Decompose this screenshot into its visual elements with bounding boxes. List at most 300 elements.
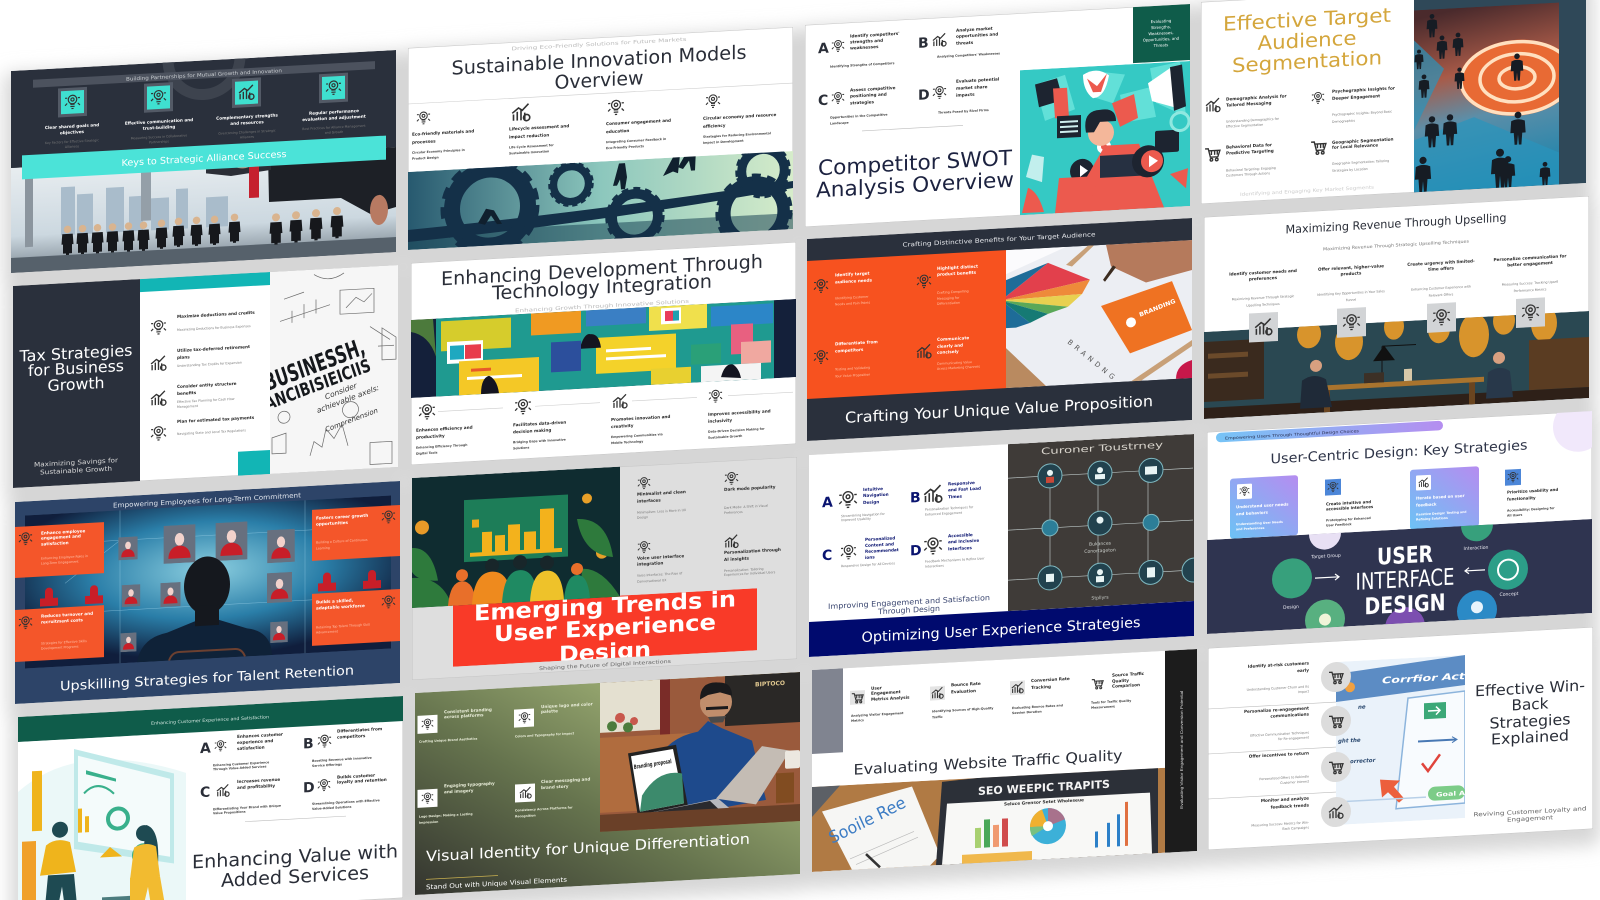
image: UI design diagram: Design xyxy=(1283,604,1299,611)
callout: skilled workforce: Advancement xyxy=(316,629,339,635)
item: personalize xyxy=(1244,703,1351,743)
image: business sketch: Consider xyxy=(324,381,359,401)
item: efficiency: Enhancing Efficiency Through xyxy=(416,443,467,450)
image: man with laptop in cafe: Branding proposal xyxy=(633,758,672,771)
item: engagement metrics: Engagement xyxy=(871,689,901,696)
item D: impacts xyxy=(956,92,975,98)
red title block: Design xyxy=(559,638,651,668)
image: UI design diagram: USER xyxy=(1377,542,1433,571)
item: data-driven: Solutions xyxy=(513,446,529,450)
column 1: preferences xyxy=(1249,275,1278,282)
item: materials xyxy=(412,109,474,161)
subtitle xyxy=(1474,806,1587,826)
item: usability: Prioritize usability and xyxy=(1507,487,1558,495)
item: voice: Voice user interface xyxy=(637,553,684,561)
item: geographic xyxy=(1311,137,1394,174)
item: engagement metrics: Analyzing Visitor Engagement xyxy=(851,711,904,718)
item: accessibility: Sustainable Growth xyxy=(708,434,742,440)
image: man with laptop in cafe xyxy=(600,672,800,832)
title: Competitor SWOT xyxy=(818,145,1012,180)
item: circular xyxy=(703,91,776,145)
subtitle xyxy=(828,593,990,619)
slide: Upskilling Strategies xyxy=(15,481,400,704)
title: Technology Integration xyxy=(491,271,712,305)
callout: turnover: recruitment costs xyxy=(41,617,83,625)
slide: Competitor SWOT xyxy=(805,4,1190,227)
item: materials: Eco-friendly materials and xyxy=(412,128,474,137)
item D: Builds customer xyxy=(337,772,376,780)
header bar xyxy=(33,61,375,88)
item: personalization: Personalization through xyxy=(724,547,781,555)
header xyxy=(18,696,403,742)
image: leader and network xyxy=(25,496,391,668)
callout: engagement: engagement and xyxy=(41,533,81,541)
left panel: Maximizing Savings for xyxy=(34,456,118,469)
title: Overview xyxy=(554,67,643,94)
item: accessibility: Improves accessibility and xyxy=(708,408,771,417)
item: communicate: concisely xyxy=(937,349,959,355)
item: differentiate: Your Value Proposition xyxy=(835,373,870,378)
item: bounce rate: Identifying Sources of High-Quality xyxy=(932,706,993,713)
image: SEO desk xyxy=(812,768,1165,872)
item: consumer xyxy=(606,97,671,150)
item B: B xyxy=(910,490,921,506)
item: minimalist: Minimalism: Less is More in UX xyxy=(637,508,687,515)
pill xyxy=(1216,421,1443,443)
item B: Differentiates from xyxy=(337,726,383,734)
slide: Effective Target Audience xyxy=(1201,0,1586,204)
item: behavioral: Behavioral Data for xyxy=(1226,142,1273,150)
item C xyxy=(200,777,281,816)
item: incentives: Customer Interest xyxy=(1280,779,1310,785)
item: minimalist: interfaces xyxy=(637,497,661,504)
item: behavioral: Customers Through Actions xyxy=(1226,171,1270,178)
image: UI design diagram: Interaction xyxy=(1464,545,1489,552)
callout: turnover: Strategies for Effective Skills xyxy=(41,639,87,646)
item: entity: Consider entity structure xyxy=(177,381,237,389)
item: messaging xyxy=(515,776,590,819)
column 3: Create urgency with limited- xyxy=(1407,258,1475,267)
item: messaging: brand story xyxy=(541,784,569,790)
card: iterate xyxy=(1410,466,1479,530)
title: Segmentation xyxy=(1232,46,1382,77)
item: geographic: Geographic Segmentation xyxy=(1332,137,1394,145)
title: Maximizing Revenue Through Upselling xyxy=(1285,211,1506,237)
item B: Personalization Techniques for xyxy=(925,505,974,512)
item: lifecycle xyxy=(509,101,569,155)
item: monitor: Back Campaigns xyxy=(1282,825,1309,831)
pill: Empowering Users Through Thoughtful Design Choices xyxy=(1225,428,1359,441)
callout: engagement: Enhancing Employee Roles in xyxy=(41,554,88,561)
item: audience needs: Identifying Customer xyxy=(835,295,869,300)
item C: Value Propositions xyxy=(213,810,246,815)
item: resources: Complementary strengths xyxy=(216,112,278,121)
item: retirement: plans xyxy=(177,354,190,360)
column 4: Personalize communication for xyxy=(1493,253,1567,262)
item C xyxy=(822,535,899,569)
item: deductions: Maximizing Deductions for Business Expenses xyxy=(177,324,251,332)
item: incentives xyxy=(1249,748,1351,787)
title: Evaluating Website Traffic Quality xyxy=(854,748,1123,779)
item D: Streamlining Operations with Effective xyxy=(312,798,380,806)
image: customer journey network xyxy=(1008,434,1194,611)
image: man with laptop in cafe: BIPTOCO xyxy=(755,680,785,688)
item C: and profitability xyxy=(237,783,275,790)
subtitle: Improving Engagement and Satisfaction xyxy=(828,593,990,611)
item: behavioral: Behavioral Targeting: Engaging xyxy=(1226,166,1276,173)
item: personalize: Effective Communication Techniques xyxy=(1250,730,1309,738)
item C: C xyxy=(822,548,832,564)
callout: engagement: Enhance employee xyxy=(41,528,85,536)
slide: Enhancing Value xyxy=(18,696,403,900)
item: goals xyxy=(45,86,99,150)
item: accessibility xyxy=(708,387,771,440)
item: usability: Accessibility: Designing for xyxy=(1507,506,1555,513)
item: demographic: Demographic Analysis for xyxy=(1226,93,1288,102)
image: gears xyxy=(408,151,793,250)
item: demographic xyxy=(1206,93,1288,130)
item A: Design xyxy=(863,499,879,505)
item: geographic: Geographic Segmentation: Tailoring xyxy=(1332,159,1389,166)
column 3: time offers xyxy=(1428,265,1454,272)
title: Effective Win- xyxy=(1475,676,1585,700)
item: consumer: Integrating Consumer Feedback in xyxy=(606,137,666,144)
item: typography: Engaging typography xyxy=(444,781,495,788)
header: Empowering Employees for Long-Term Commitment xyxy=(113,491,301,510)
item: differentiate: Differentiate from xyxy=(835,339,878,346)
item: psychographic xyxy=(1312,85,1396,125)
green tag: Opportunities, and xyxy=(1143,36,1180,43)
title: Enhancing Development Through xyxy=(441,251,763,290)
item: intuitive xyxy=(1325,477,1374,528)
card: understand xyxy=(1230,475,1298,539)
subtitle: Driving Eco-Friendly Solutions for Future Markets xyxy=(512,37,687,52)
column 1: Identify customer needs and xyxy=(1229,268,1297,277)
item: psychographic: Demographics xyxy=(1332,119,1355,124)
item: evaluation: Regular performance xyxy=(309,108,359,116)
item: geographic: for Local Relevance xyxy=(1332,142,1378,150)
left panel: for Business xyxy=(28,357,124,380)
item A: Identify competitors' xyxy=(850,31,900,39)
item: personalize: for Re-engagement xyxy=(1278,735,1310,741)
image: negotiation room xyxy=(1204,311,1589,419)
item D: loyalty and retention xyxy=(337,777,387,785)
item: dark mode: Preferences xyxy=(724,510,743,515)
item B: Responsive xyxy=(948,480,975,486)
item: benefits xyxy=(917,264,978,307)
slide: Tax Strategies xyxy=(13,265,398,488)
item: minimalist: Design xyxy=(637,515,648,520)
item C: Assess competitive xyxy=(850,85,896,93)
item C: ions xyxy=(865,554,875,560)
red title block: Emerging Trends in xyxy=(474,587,736,627)
item A: Enhancing Customer Experience xyxy=(213,760,269,767)
item: bounce rate xyxy=(930,680,993,720)
item: source traffic: Tools for Traffic Quality xyxy=(1091,699,1131,705)
item: engagement metrics xyxy=(850,684,910,723)
card: understand: and behaviors xyxy=(1236,510,1269,516)
slide: User-Centric Design xyxy=(1207,398,1600,658)
card: understand: Understanding User Needs xyxy=(1236,520,1283,526)
image: coloured dashboard xyxy=(411,299,796,398)
image: corrective action UI: Goal A xyxy=(1436,790,1465,799)
item: personalize: Personalize re-engagement xyxy=(1244,705,1309,714)
item: benefits: product benefits xyxy=(937,270,977,277)
item: differentiate xyxy=(814,339,878,380)
left panel xyxy=(13,279,140,488)
item: consumer: Consumer engagement and xyxy=(606,118,671,126)
item: audience needs: Needs and Pain Points xyxy=(835,301,871,306)
item: typography: and imagery xyxy=(444,788,474,794)
item: lifecycle: Lifecycle assessment and xyxy=(509,123,569,131)
item: branding xyxy=(418,707,492,744)
item: differentiate: Testing and Validating xyxy=(834,366,870,372)
item D xyxy=(910,531,985,569)
item: retirement: Understanding Tax Credits for Expansion xyxy=(177,361,242,368)
item: usability: functionality xyxy=(1507,495,1536,502)
title xyxy=(1223,4,1391,78)
image: SEO desk: Sooile Ree xyxy=(826,793,909,848)
column 2: Identifying Key Opportunities in Your Sales xyxy=(1317,289,1385,297)
item A: A xyxy=(200,740,211,757)
image: UI design diagram: INTERFACE xyxy=(1356,565,1454,596)
item D: D xyxy=(918,87,930,104)
title: Sustainable Innovation Models xyxy=(451,42,746,80)
column 3: Relevant Offers xyxy=(1429,292,1454,298)
item: goals: Clear shared goals and xyxy=(45,122,99,130)
item: intuitive: accessible interfaces xyxy=(1326,504,1374,512)
item: demographic: Effective Segmentation xyxy=(1226,123,1263,129)
item D: Interfaces xyxy=(948,545,972,551)
item B: Analyzing Competitors' Weaknesses xyxy=(937,51,1000,59)
title xyxy=(1475,676,1585,749)
item D: Value-Added Solutions xyxy=(312,805,352,811)
callout: career growth: Building a Culture of Continuous xyxy=(316,538,368,545)
item: dark mode xyxy=(724,470,776,515)
item: evaluation xyxy=(302,72,366,136)
image: corrective action UI: Corrfior Act xyxy=(1382,672,1466,687)
item: behavioral: Predictive Targeting xyxy=(1226,148,1274,156)
item C: Content and xyxy=(865,541,894,548)
column 2: products xyxy=(1341,270,1362,277)
slide: Optimizing User Experience xyxy=(809,433,1206,657)
callout: career growth: opportunities xyxy=(316,520,348,527)
item: at-risk xyxy=(1247,658,1351,697)
item: messaging: Consistency Across Platforms for xyxy=(515,805,573,813)
item: messaging: Clear messaging and xyxy=(541,776,590,784)
item D: Threats Posed by Rival Firms xyxy=(938,108,989,115)
item B: Boosting Revenue with Innovative xyxy=(312,756,372,763)
callout: engagement xyxy=(15,522,104,578)
item B: opportunities and xyxy=(956,31,998,39)
image: SEO desk: Seluce Grensor Setet Wholeseue xyxy=(1004,797,1084,807)
subtitle: Maximizing Revenue Through Strategic Upselling Techniques xyxy=(1323,239,1469,252)
green tag: Strengths, xyxy=(1151,24,1171,30)
item C: Personalized xyxy=(865,535,895,542)
column 1: Upselling Techniques xyxy=(1246,302,1280,308)
column 2: Funnel xyxy=(1346,298,1356,302)
column 1 xyxy=(1229,268,1297,344)
item: dark mode: Dark mode popularity xyxy=(724,484,776,492)
item: lifecycle: Life Cycle Assessment for xyxy=(509,143,554,149)
subtitle: Engagement xyxy=(1507,815,1554,824)
item B: competitors xyxy=(337,733,366,740)
item: conversion rate: Evaluating Bounce Rates and xyxy=(1012,703,1063,710)
title band: Keys to Strategic Alliance Success xyxy=(122,149,287,169)
header bar: Building Partnerships for Mutual Growth and Innovation xyxy=(126,68,282,83)
item: resources xyxy=(216,76,278,141)
callout: skilled workforce: Retaining Top Talent Through Skill xyxy=(316,623,370,630)
green tag xyxy=(1133,4,1190,63)
illustration: marketer with camera xyxy=(1020,61,1190,216)
item: evaluation: and Growth xyxy=(325,130,343,135)
item: materials: Circular Economy Principles in xyxy=(412,148,465,155)
item: data-driven: decision making xyxy=(513,427,551,434)
card: iterate: Iterate based on user xyxy=(1416,493,1465,501)
item B xyxy=(918,25,1000,60)
side strip: Evaluating Visitor Engagement and Conversion Potential xyxy=(1179,691,1184,809)
item: conversion rate: Conversion Rate xyxy=(1031,676,1070,683)
item A: strengths and xyxy=(850,38,883,45)
item: innovation: Mobile Technology xyxy=(611,439,643,445)
item: psychographic: Psychographic Insights for xyxy=(1332,85,1396,94)
item: psychographic: Psychographic Insights: Beyond Basic xyxy=(1332,110,1392,117)
image: UI design diagram: DESIGN xyxy=(1364,590,1445,620)
slide: Sustainable Innovation Models xyxy=(408,27,793,266)
image: UI design diagram: Concept xyxy=(1500,591,1519,598)
item B xyxy=(303,726,383,768)
item: personalize: communications xyxy=(1270,711,1309,719)
column 3: Enhancing Customer Experience with xyxy=(1411,284,1471,292)
slide: Win-Back Strategies xyxy=(1208,627,1593,850)
item: geographic: Strategies by Location xyxy=(1332,167,1368,173)
item B: Service Offerings xyxy=(312,762,342,768)
callout: engagement: satisfaction xyxy=(41,540,69,547)
item B: Enhanced Engagement xyxy=(925,511,963,517)
image: presentation in jungle xyxy=(412,466,620,608)
callout: career growth: Learning xyxy=(316,546,330,551)
card: understand: and Preferences xyxy=(1236,526,1265,531)
item: data-driven xyxy=(513,397,566,450)
item: communicate: Communicate xyxy=(937,335,969,342)
item: monitor xyxy=(1251,793,1351,833)
item B: and Fast Load xyxy=(948,486,981,492)
image: corrective action UI xyxy=(1336,655,1466,824)
item: circular: Strategies for Reducing Environmental xyxy=(703,131,771,139)
column 1: Maximizing Revenue Through Strategic xyxy=(1232,294,1295,301)
title: Analysis Overview xyxy=(816,167,1014,202)
title band: Optimizing User Experience Strategies xyxy=(862,615,1140,646)
image: customer journey network: Bukances xyxy=(1089,541,1112,548)
item: goals: Key Factors for Effective Strategic xyxy=(45,138,99,145)
item: innovation: Empowering Communities via xyxy=(611,432,663,439)
item: lifecycle: impact reduction xyxy=(509,132,549,139)
column 3 xyxy=(1407,258,1475,334)
item: engagement metrics: User xyxy=(871,685,883,691)
item: innovation: Promotes innovation and xyxy=(611,414,670,422)
item: psychographic: Deeper Engagement xyxy=(1332,93,1380,101)
item B: Analyze market xyxy=(956,26,993,33)
item: benefits: Highlight distinct xyxy=(937,264,978,271)
image: UI design diagram xyxy=(1207,519,1592,634)
item: bounce rate: Evaluation xyxy=(951,688,976,694)
item: intuitive: Create intuitive and xyxy=(1326,499,1371,507)
column 4: Measuring Success: Tracking Upsell xyxy=(1502,280,1558,287)
callout: skilled workforce xyxy=(312,589,400,646)
item: retirement xyxy=(151,344,250,371)
photo: figurines and businessman xyxy=(11,147,396,273)
item C xyxy=(818,85,896,126)
item B: B xyxy=(918,35,929,52)
item: evaluation: Best Practices for Alliance Management xyxy=(302,124,366,131)
red title block xyxy=(453,587,757,668)
item: consumer: Eco-Friendly Products xyxy=(606,144,644,150)
item D: Accessible xyxy=(948,532,973,538)
item: communication: Partnerships xyxy=(149,139,169,144)
item: innovation: creativity xyxy=(611,423,634,429)
title band xyxy=(809,601,1194,657)
title: Audience xyxy=(1258,27,1356,55)
item: circular: Circular economy and resource xyxy=(703,112,776,121)
item: voice: Voice Interfaces: The Rise of xyxy=(637,571,683,578)
item: behavioral xyxy=(1205,142,1276,179)
orange panel xyxy=(807,250,1006,399)
item A: experience and xyxy=(237,738,273,745)
item A: Identifying Strengths of Competitors xyxy=(830,61,895,69)
item: audience needs: audience needs xyxy=(835,277,872,284)
left panel: Growth xyxy=(48,374,104,395)
item: intuitive: Prototyping for Enhanced xyxy=(1326,516,1371,523)
title: Crafting Your Unique Value Proposition xyxy=(845,392,1153,427)
item B: Times xyxy=(948,494,962,499)
image: branding desk: BRANDING xyxy=(1138,298,1177,319)
column 4: better engagement xyxy=(1507,260,1553,267)
item: benefits: Messaging for xyxy=(937,296,960,301)
item C: C xyxy=(200,785,210,801)
title: Back xyxy=(1511,694,1549,714)
item: monitor: Measuring Success: Metrics for Win- xyxy=(1251,820,1309,828)
item C: positioning and xyxy=(850,92,887,99)
item: innovation xyxy=(611,392,670,445)
column 4: Performance Metrics xyxy=(1514,287,1547,293)
callout: turnover xyxy=(15,605,104,662)
item: bounce rate: Traffic xyxy=(932,715,943,719)
item: resources: Overcoming Challenges in Strategic xyxy=(218,129,276,136)
item: entity: Management xyxy=(177,404,199,409)
callout: turnover: Development Programs xyxy=(41,645,79,651)
item: audience needs: Identify target xyxy=(835,271,870,277)
item: entity: Effective Tax Planning for Cash Flow xyxy=(177,397,235,404)
illustration: analysts at dashboard xyxy=(18,733,186,900)
footer: Identifying and Engaging Key Market Segments xyxy=(1240,185,1375,198)
item: engagement metrics: Metrics xyxy=(851,718,864,723)
item: communication: Measuring Success in Collaborative xyxy=(131,133,187,140)
item: voice xyxy=(637,539,684,584)
title: User-Centric Design: Key Strategies xyxy=(1270,438,1527,468)
item: logo: Unique logo and color xyxy=(541,701,594,709)
item: entity xyxy=(151,381,237,410)
item: circular: Impact in Development xyxy=(703,139,744,145)
item C: Differentiating Your Brand with Unique xyxy=(213,804,281,811)
slide: Emerging Trends xyxy=(412,457,797,680)
image: business sketch xyxy=(261,265,398,474)
card: iterate: Refining Solutions xyxy=(1416,516,1448,522)
item: materials: processes xyxy=(412,138,436,145)
item D: Evaluate potential xyxy=(956,76,1000,84)
item A xyxy=(822,486,889,523)
item: communicate: Communicating Value xyxy=(937,360,972,366)
header: Enhancing Customer Experience and Satisfaction xyxy=(151,714,269,727)
